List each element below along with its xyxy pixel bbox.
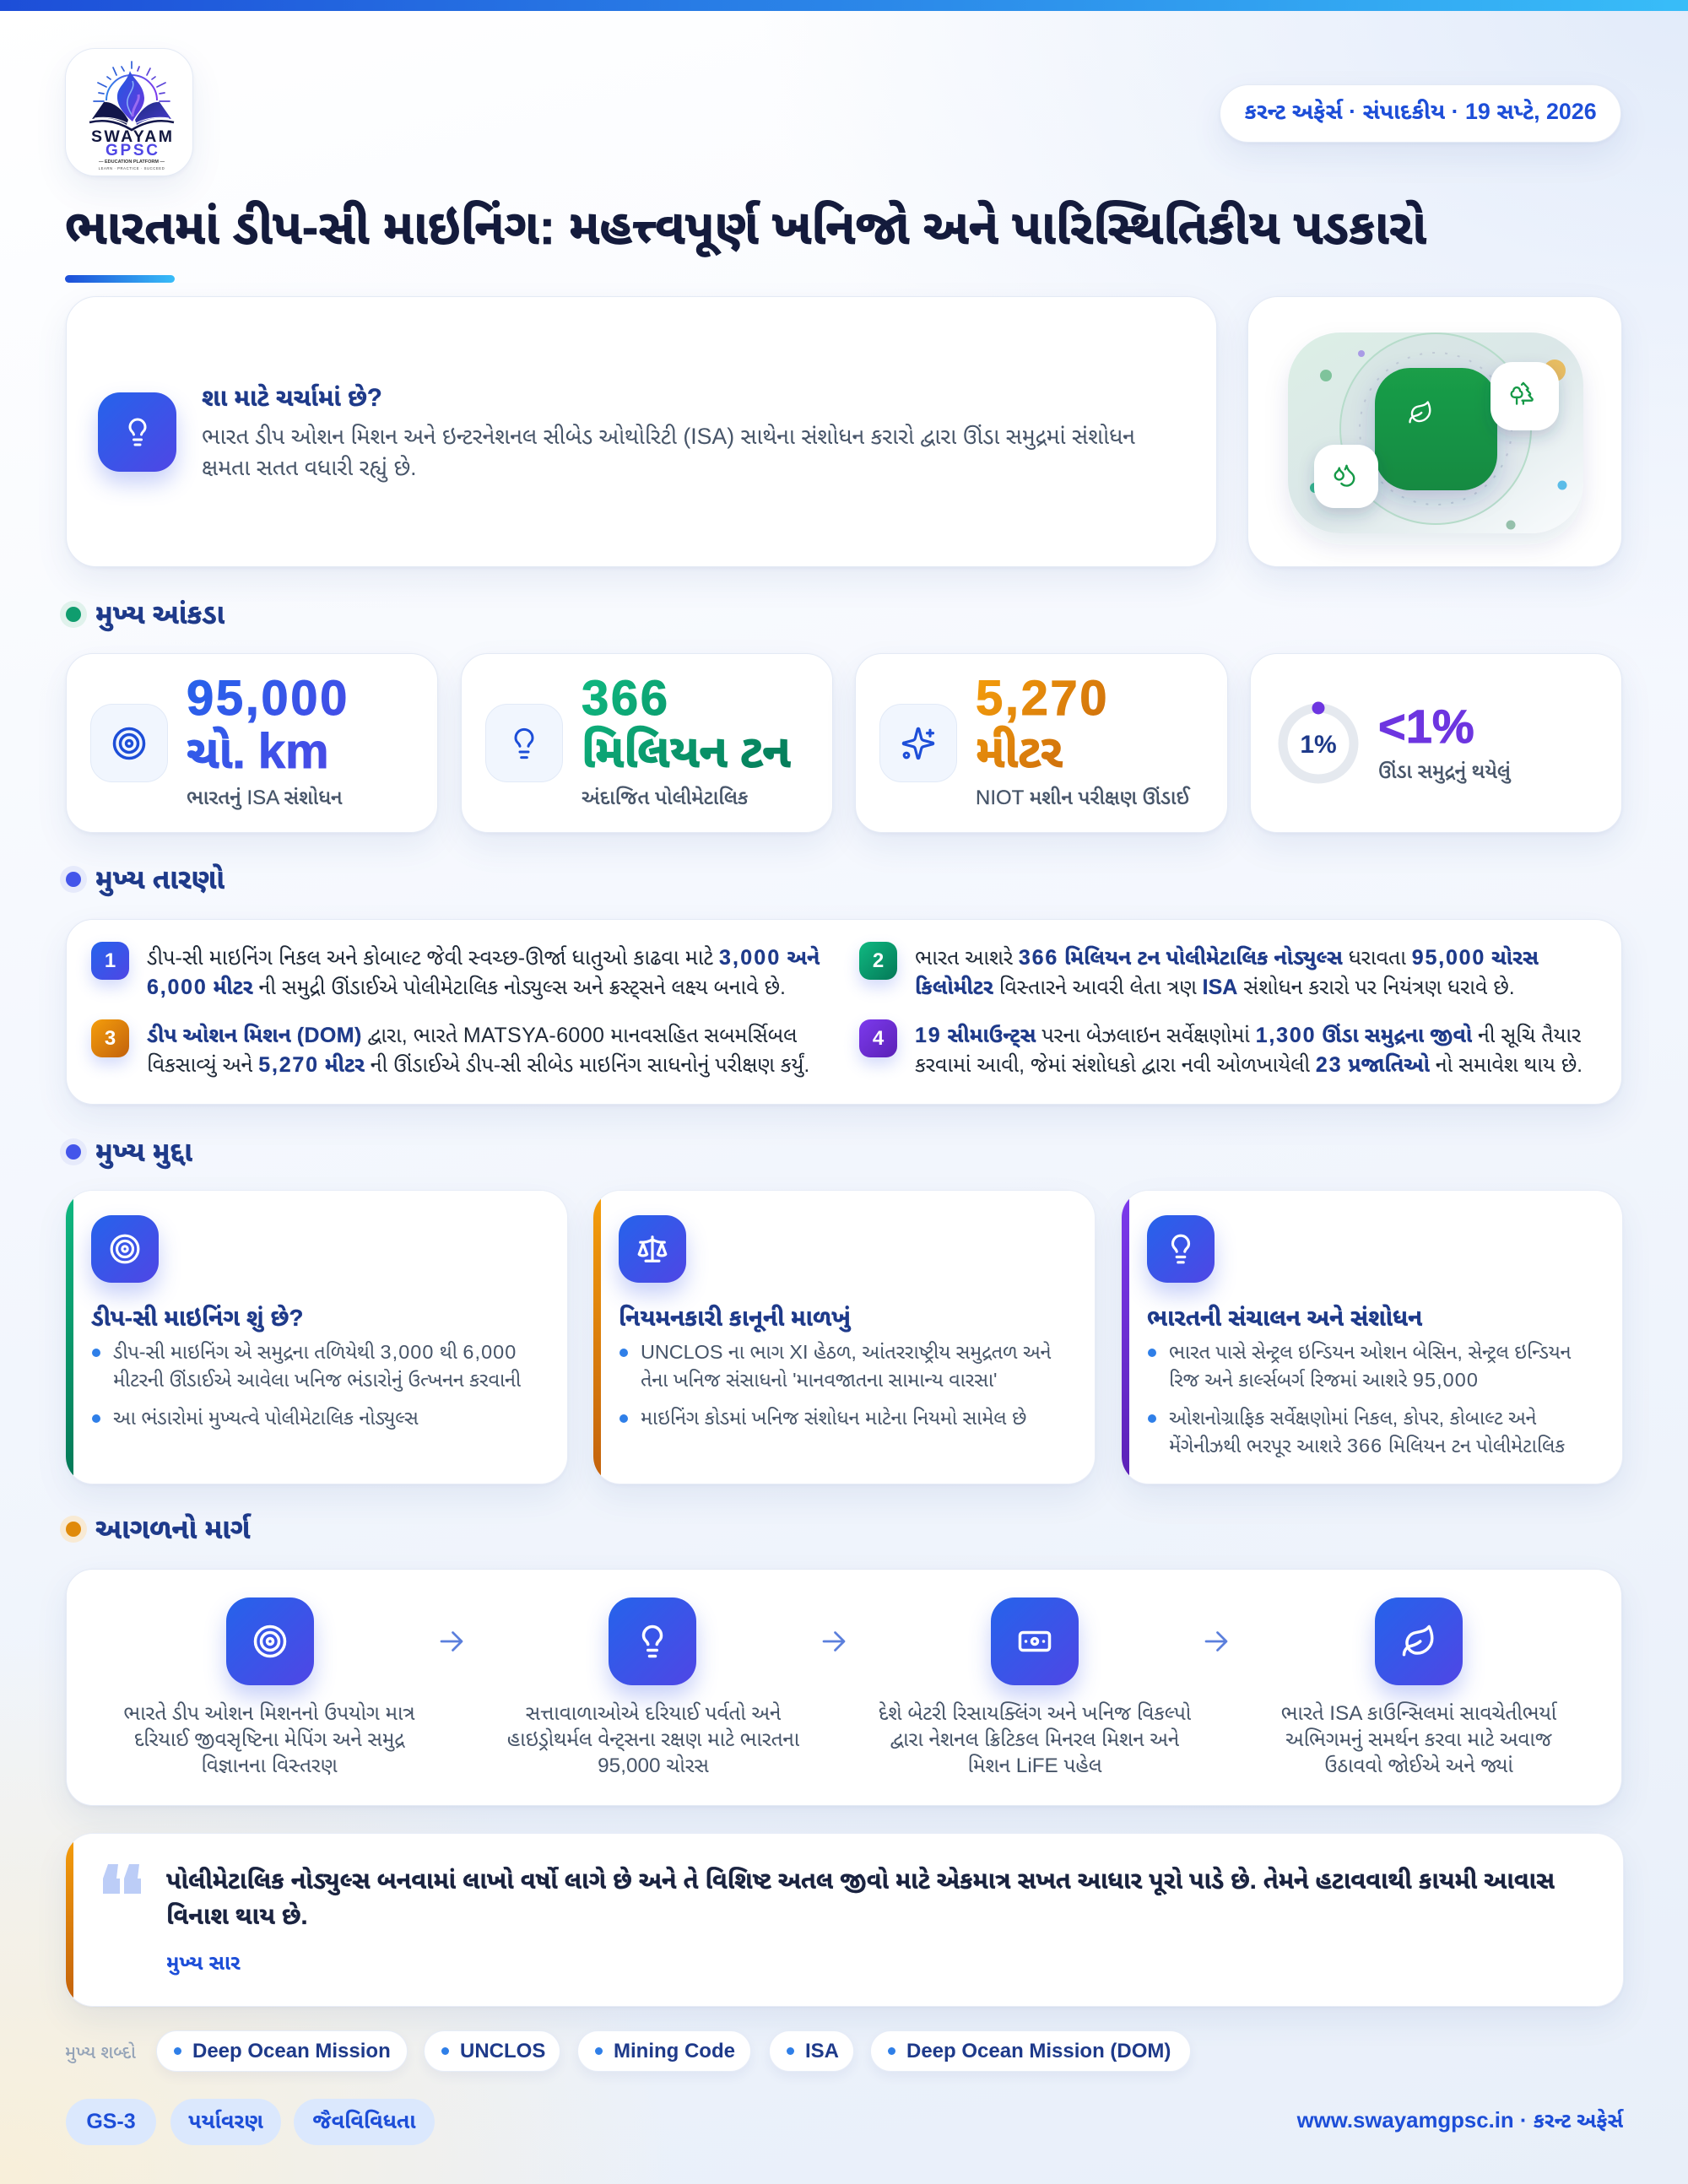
keyword: UNCLOS: UNCLOS <box>460 2040 545 2062</box>
keywords row <box>65 2030 1190 2074</box>
text: why in news: ભારત ડીપ ઓશન મિશન અને ઇન્ટરનેશનલ સીબેડ ઓથોરિટી (ISA) સાથેના સંશોધન કરારો દ્વારા ઊંડા સમુદ્રમાં સંશોધન <box>202 424 1135 449</box>
bullet list: માઇનિંગ કોડમાં ખનિજ સંશોધન માટેના નિયમો સામેલ છે <box>641 1407 1026 1429</box>
logo mark <box>89 61 174 170</box>
label: ઊંડા સમુદ્રનું થયેલું <box>1378 760 1511 783</box>
finding 4: 4 <box>873 1026 884 1050</box>
text: why in news <box>202 424 1135 483</box>
bullet list: ડીપ-સી માઇનિંગ એ સમુદ્રના તળિયેથી 3,000 થી 6,000 <box>113 1341 517 1363</box>
bullet list: ઓશનોગ્રાફિક સર્વેક્ષણોમાં નિકલ, કોપર, કોબાલ્ટ અને <box>1169 1407 1536 1429</box>
bullet list <box>619 1341 1052 1429</box>
stat card: under 1% <box>1250 653 1622 833</box>
title: ભારતમાં ડીપ-સી માઇનિંગ: મહત્ત્વપૂર્ણ ખનિજો અને પારિસ્થિતિકીય પડકારો <box>65 201 1426 255</box>
label: અંદાજિત પોલીમેટાલિક <box>582 787 748 809</box>
heading: key points <box>60 1136 192 1170</box>
number: મીટર <box>976 726 1063 777</box>
step 3 text: દ્વારા નેશનલ ક્રિટિકલ મિનરલ મિશન અને <box>890 1728 1179 1751</box>
step 4 text: ભારતે ISA કાઉન્સિલમાં સાવચેતીભર્યા <box>1281 1702 1556 1725</box>
tag: environment: પર્યાવરણ <box>188 2110 263 2133</box>
keyword: DOM <box>870 2030 1191 2072</box>
card title: ભારતની સંચાલન અને સંશોધન <box>1147 1305 1422 1331</box>
number: મિલિયન ટન <box>582 726 791 777</box>
logo card <box>65 48 193 176</box>
icon: lightbulb <box>485 704 563 782</box>
finding 4: કરવામાં આવી, જેમાં સંશોધકો દ્વારા નવી ઓળખાયેલી 23 પ્રજાતિઓ નો સમાવેશ થાય છે. <box>915 1053 1582 1077</box>
panel: key quote <box>66 1834 1623 2006</box>
icon: target <box>91 1215 159 1283</box>
date pill <box>1220 84 1621 143</box>
number: ચો. km <box>187 724 329 779</box>
arrow 3 <box>1205 1631 1227 1652</box>
quote text <box>166 1867 1555 1930</box>
label: ભારતનું ISA સંશોધન <box>187 787 343 809</box>
heading: why in news: શા માટે ચર્ચામાં છે? <box>202 384 382 412</box>
step 4 text <box>1281 1701 1558 1777</box>
finding 3: વિકસાવ્યું અને 5,270 મીટર ની ઊંડાઈએ ડીપ-સી સીબેડ માઇનિંગ સાધનોનું પરીક્ષણ કર્યું. <box>147 1053 809 1077</box>
keywords label: મુખ્ય શબ્દો <box>65 2042 136 2062</box>
keyword: Mining Code: Mining Code <box>614 2040 735 2062</box>
panel: eco illustration <box>1247 296 1622 567</box>
arrow 1 <box>441 1631 463 1652</box>
stat card: 5,270 <box>855 653 1228 833</box>
finding 4 <box>852 1019 1582 1077</box>
tag: GS-3: GS-3 <box>86 2110 136 2133</box>
finding 1: ડીપ-સી માઇનિંગ નિકલ અને કોબાલ્ટ જેવી સ્વચ્છ-ઊર્જા ધાતુઓ કાઢવા માટે 3,000 અને <box>147 946 820 970</box>
step 1 icon: target <box>226 1597 314 1685</box>
donut chart: 1% <box>1300 731 1337 759</box>
step 4 text: અભિગમનું સમર્થન કરવા માટે અવાજ <box>1285 1728 1552 1751</box>
illustration <box>1283 332 1588 550</box>
bullet list: UNCLOS ના ભાગ XI હેઠળ, આંતરરાષ્ટ્રીય સમુદ્રતળ અને <box>641 1341 1051 1363</box>
quote text: પોલીમેટાલિક નોડ્યુલ્સ બનવામાં લાખો વર્ષો લાગે છે અને તે વિશિષ્ટ અતલ જીવો માટે એકમાત્ર સખત આધાર પૂરો પાડે છે. તેમને હટાવવાથી કાયમી આવાસ <box>166 1868 1555 1895</box>
icon: sparkles <box>879 704 957 782</box>
number <box>976 673 1117 778</box>
tag: GS-3 <box>66 2099 156 2145</box>
title underline <box>65 275 175 283</box>
finding 2: કિલોમીટર વિસ્તારને આવરી લેતા ત્રણ ISA સંશોધન કરારો પર નિયંત્રણ ધરાવે છે. <box>915 976 1515 999</box>
step 3 icon: banknote <box>991 1597 1079 1685</box>
panel: what is deep-sea mining <box>66 1191 567 1484</box>
tag: biodiversity: જૈવવિવિધતા <box>312 2110 416 2133</box>
number: <1% <box>1378 700 1474 753</box>
footer website: www.swayamgpsc.in · કરન્ટ અફેર્સ <box>1297 2109 1623 2133</box>
finding 1: 1 <box>105 949 116 972</box>
donut chart <box>1278 702 1359 783</box>
bullet list: મેંગેનીઝથી ભરપૂર આશરે 366 મિલિયન ટન પોલીમેટાલિક <box>1169 1435 1565 1457</box>
heading: key points: મુખ્ય મુદ્દા <box>95 1136 192 1167</box>
keyword: DOM: Deep Ocean Mission (DOM) <box>906 2040 1171 2062</box>
panel: way forward <box>66 1569 1622 1806</box>
keyword: Deep Ocean Mission: Deep Ocean Mission <box>192 2040 391 2062</box>
card title: નિયમનકારી કાનૂની માળખું <box>619 1305 851 1331</box>
keyword: Mining Code <box>577 2030 751 2072</box>
text: why in news: ક્ષમતા સતત વધારી રહ્યું છે. <box>202 455 417 480</box>
heading: key findings: મુખ્ય તારણો <box>95 863 225 895</box>
bullet list <box>92 1341 521 1430</box>
icon: target <box>90 704 168 782</box>
step 4 icon: leaf <box>1375 1597 1463 1685</box>
icon: lightbulb <box>1147 1215 1215 1283</box>
bullet list: તેના ખનિજ સંસાધનો 'માનવજાતના સામાન્ય વારસા' <box>641 1369 998 1391</box>
bullet list <box>1148 1341 1572 1457</box>
quote text: વિનાશ થાય છે. <box>166 1903 307 1930</box>
arrow 2 <box>822 1631 846 1652</box>
finding 3: 3 <box>105 1026 116 1050</box>
logo mark: — EDUCATION PLATFORM — <box>99 159 165 165</box>
logo mark: LEARN · PRACTICE · SUCCEED <box>99 166 165 170</box>
heading: way forward: આગળનો માર્ગ <box>95 1513 250 1544</box>
keyword: Deep Ocean Mission <box>156 2030 408 2072</box>
finding 1 <box>84 942 820 999</box>
finding 1: 6,000 મીટર ની સમુદ્રી ઊંડાઈએ પોલીમેટાલિક નોડ્યુલ્સ અને ક્રસ્ટ્સને લક્ષ્ય બનાવે છે. <box>147 976 786 999</box>
finding 2: 2 <box>873 949 884 972</box>
top gradient bar <box>0 0 1688 11</box>
panel: India operations and research <box>1122 1191 1622 1484</box>
step 4 text: ઉઠાવવો જોઈએ અને જ્યાં <box>1324 1754 1513 1777</box>
step 1 text: વિજ્ઞાનના વિસ્તરણ <box>201 1754 338 1777</box>
finding 2 <box>852 942 1539 999</box>
icon: scales <box>619 1215 686 1283</box>
step 3 text: દેશે બેટરી રિસાયક્લિંગ અને ખનિજ વિકલ્પો <box>879 1702 1191 1725</box>
stat card: 95,000 <box>66 653 438 833</box>
bullet list: ભારત પાસે સેન્ટ્રલ ઇન્ડિયન ઓશન બેસિન, સેન્ટ્રલ ઇન્ડિયન <box>1169 1341 1571 1363</box>
step 2 text: 95,000 ચોરસ <box>598 1754 709 1777</box>
label: NIOT મશીન પરીક્ષણ ઊંડાઈ <box>976 787 1189 809</box>
step 1 text <box>123 1701 415 1777</box>
keyword: ISA: ISA <box>805 2040 839 2062</box>
step 2 text <box>507 1701 799 1777</box>
step 2 icon: lightbulb <box>609 1597 696 1685</box>
quote mark <box>103 1864 141 1894</box>
card title: ડીપ-સી માઇનિંગ શું છે? <box>91 1305 303 1331</box>
tag: biodiversity <box>294 2099 435 2145</box>
number <box>582 673 799 778</box>
step 1 text: ભારતે ડીપ ઓશન મિશનનો ઉપયોગ માત્ર <box>123 1702 415 1725</box>
number <box>187 673 358 779</box>
bullet list: આ ભંડારોમાં મુખ્યત્વે પોલીમેટાલિક નોડ્યુલ્સ <box>113 1407 419 1429</box>
panel: regulatory framework <box>593 1191 1095 1484</box>
keyword: ISA <box>769 2030 854 2072</box>
quote caption: મુખ્ય સાર <box>166 1952 241 1975</box>
bullet list: મીટરની ઊંડાઈએ આવેલા ખનિજ ભંડારોનું ઉત્ખનન કરવાની <box>113 1369 521 1391</box>
logo mark: GPSC <box>106 142 158 159</box>
step 3 text: મિશન LiFE પહેલ <box>967 1754 1102 1777</box>
step 3 text <box>879 1701 1191 1777</box>
finding 3: ડીપ ઓશન મિશન (DOM) દ્વારા, ભારતે MATSYA-6000 માનવસહિત સબમર્સિબલ <box>147 1024 797 1047</box>
logo mark: SWAYAM <box>91 127 172 146</box>
keyword: UNCLOS <box>424 2030 560 2072</box>
step 2 text: સત્તાવાળાઓએ દરિયાઈ પર્વતો અને <box>526 1702 781 1725</box>
panel: key findings <box>66 919 1622 1105</box>
finding 2: ભારત આશરે 366 મિલિયન ટન પોલીમેટાલિક નોડ્યુલ્સ ધરાવતા 95,000 ચોરસ <box>915 946 1539 970</box>
stat card: 366 <box>461 653 833 833</box>
icon: lightbulb <box>98 392 176 472</box>
panel: why in news <box>66 296 1217 567</box>
step 1 text: દરિયાઈ જીવસૃષ્ટિના મેપિંગ અને સમુદ્ર <box>134 1728 404 1751</box>
heading: key figures: મુખ્ય આંકડા <box>95 598 225 630</box>
date pill: કરન્ટ અફેર્સ · સંપાદકીય · 19 સપ્ટે, 2026 <box>1244 99 1597 124</box>
step 2 text: હાઇડ્રોથર્મલ વેન્ટ્સના રક્ષણ માટે ભારતના <box>507 1728 799 1751</box>
bullet list: રિજ અને કાર્લ્સબર્ગ રિજમાં આશરે 95,000 <box>1169 1369 1479 1391</box>
finding 4: 19 સીમાઉન્ટ્સ પરના બેઝલાઇન સર્વેક્ષણોમાં 1,300 ઊંડા સમુદ્રના જીવો ની સૂચિ તૈયાર <box>915 1024 1581 1047</box>
finding 3 <box>84 1019 809 1077</box>
tag: environment <box>170 2099 281 2145</box>
